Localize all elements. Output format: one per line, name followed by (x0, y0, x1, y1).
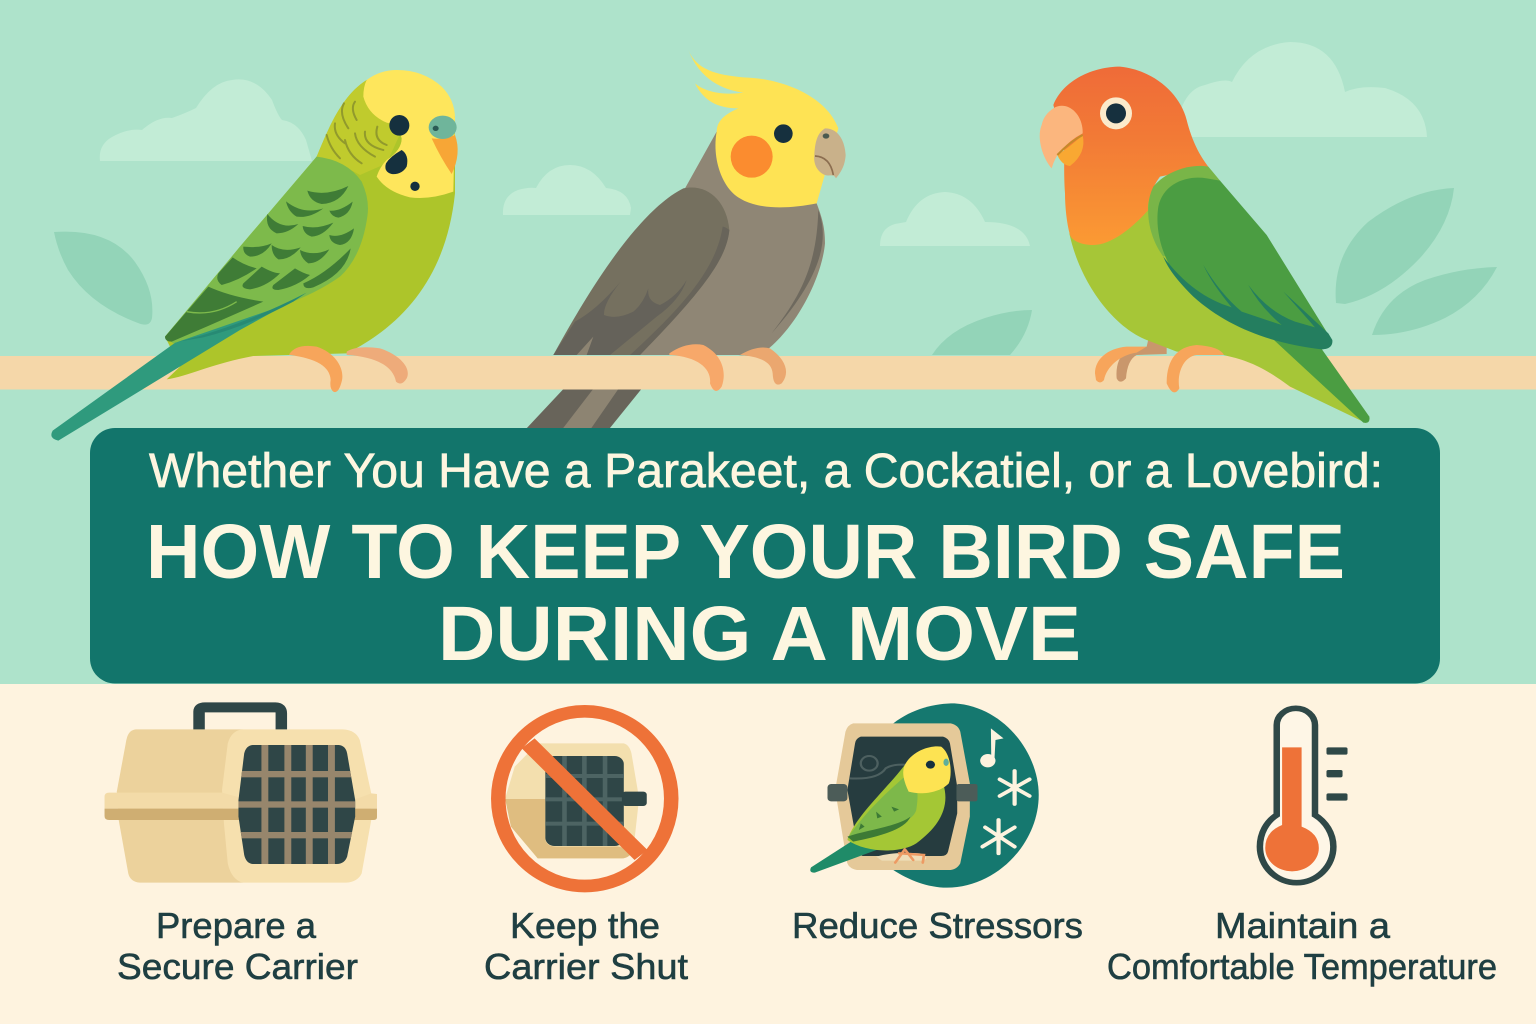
perch (0, 356, 1536, 390)
lovebird head (1053, 67, 1208, 245)
lovebird foot far (1095, 347, 1147, 382)
cockatiel breast shadow (772, 210, 823, 333)
title banner (90, 428, 1440, 684)
main heading line 1: HOW TO KEEP YOUR BIRD SAFE (146, 509, 1345, 595)
parakeet eye (389, 115, 409, 136)
teal backdrop (893, 703, 1039, 888)
label: prepare a secure carrier: Prepare a (156, 905, 317, 946)
cockatiel foot right (740, 347, 786, 385)
snowflakes (982, 771, 1030, 853)
carrier frame (835, 723, 970, 870)
bird: lovebird (1040, 67, 1370, 423)
parakeet beak (432, 135, 458, 174)
label: maintain a comfortable temperature: Maintain a (1215, 905, 1391, 946)
icon: reduce stressors (810, 703, 1039, 888)
main heading line 2: DURING A MOVE (438, 591, 1081, 677)
lovebird foot near (1167, 345, 1224, 392)
parakeet foot left (289, 346, 342, 392)
lovebird beak (1057, 135, 1083, 166)
label: keep the carrier shut (484, 905, 688, 987)
mini parakeet (810, 746, 951, 873)
lovebird tail (1267, 333, 1370, 423)
cockatiel beak (814, 128, 846, 178)
parakeet nape stripes (327, 102, 387, 163)
subtitle: Whether You Have a Parakeet, a Cockatiel, or a Lovebird: (149, 445, 1383, 498)
bird: cockatiel (553, 50, 846, 391)
lovebird wing (1157, 178, 1332, 349)
label: keep the carrier shut: Carrier Shut (484, 946, 688, 987)
cockatiel eye (774, 124, 793, 143)
parakeet wing scallops (217, 186, 354, 290)
label: reduce stressors: Reduce Stressors (792, 905, 1083, 946)
cockatiel wing (553, 187, 729, 355)
label: prepare a secure carrier (117, 905, 358, 987)
parakeet tail (51, 293, 307, 441)
parakeet yellow face (363, 70, 455, 198)
cockatiel yellow head and crest (688, 50, 838, 207)
bird: parakeet (51, 70, 458, 441)
lovebird eye (1100, 97, 1132, 129)
label: keep the carrier shut: Keep the (510, 905, 660, 946)
parakeet body (165, 73, 455, 379)
parakeet wing (165, 157, 368, 343)
lovebird far leg (1116, 339, 1167, 382)
label: maintain a comfortable temperature (1107, 905, 1497, 987)
background leaves (54, 188, 1497, 355)
parakeet foot right (347, 347, 408, 384)
cockatiel foot left (669, 344, 724, 391)
cockatiel body (553, 132, 825, 356)
lovebird body (1069, 183, 1367, 423)
lovebird wing shoulder (1148, 166, 1227, 257)
icon: secure carrier (105, 707, 377, 883)
sky background (0, 0, 1536, 684)
background clouds (100, 42, 1427, 246)
label: prepare a secure carrier: Secure Carrier (117, 946, 358, 987)
icon: thermometer (1260, 708, 1348, 883)
parakeet wing primaries (165, 287, 263, 342)
music note (980, 728, 1004, 767)
parakeet cheek spot (385, 150, 407, 174)
parakeet nape (317, 80, 403, 175)
cockatiel tail behind perch (525, 387, 643, 430)
parakeet cere (429, 116, 457, 139)
cream footer panel (0, 684, 1536, 1024)
cockatiel orange cheek (731, 136, 773, 178)
cockatiel wing feathers (553, 280, 687, 355)
icon: carrier shut prohibition (498, 711, 671, 886)
label: maintain a comfortable temperature: Comfortable Temperature (1107, 946, 1497, 987)
lovebird wing tips (1163, 257, 1332, 349)
